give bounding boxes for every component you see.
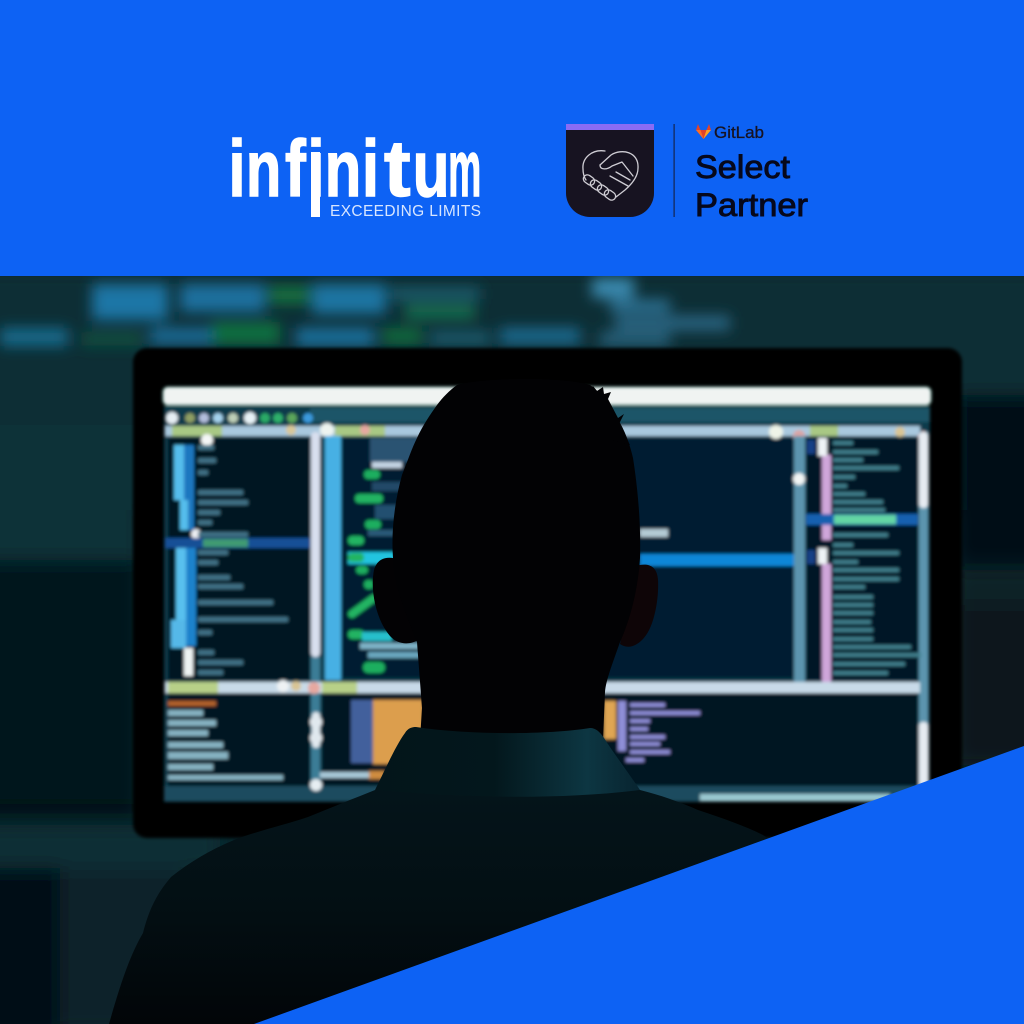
left selected row: [165, 538, 310, 548]
lower left code: [168, 701, 283, 780]
lower right code: [618, 701, 700, 762]
person: hair spikes: [588, 386, 630, 445]
icon: handshake: [582, 151, 638, 202]
right selected row: [806, 514, 918, 525]
centre code and green tags: [348, 438, 425, 673]
partner title: Partner: [695, 187, 808, 223]
person: ears: [373, 558, 658, 647]
person: head and neck: [392, 379, 640, 740]
right code tree: [807, 438, 921, 682]
logo: infinitum: [228, 124, 481, 220]
partner badge: [566, 124, 654, 217]
person: collar: [375, 727, 640, 797]
person: body: [109, 790, 800, 1024]
centre blue row: [640, 554, 794, 566]
logo: infinitum: u: [413, 124, 449, 213]
orange and blue columns: [320, 700, 616, 779]
header bars: [165, 426, 920, 436]
partner title: [695, 149, 808, 223]
top white bar: [163, 387, 931, 405]
blurred background code: [0, 278, 730, 346]
lower header bar: [165, 682, 920, 693]
logo: infinitum: f: [285, 124, 306, 213]
vertical bars: [311, 432, 320, 657]
logo tagline: EXCEEDING LIMITS: [330, 203, 481, 220]
partner title: Select: [695, 149, 790, 185]
header band: [0, 0, 1024, 276]
logo: infinitum: i: [362, 124, 379, 213]
logo: infinitum: n: [246, 124, 281, 213]
logo: infinitum: n: [325, 124, 361, 213]
photo: room background: [0, 276, 1024, 1024]
monitor: [133, 348, 962, 838]
divider: [674, 124, 675, 217]
status line: [700, 794, 890, 801]
logo: infinitum: i: [228, 124, 246, 213]
tab row dots: [166, 412, 313, 424]
logo: infinitum: i: [308, 124, 324, 213]
logo descender stroke: [311, 152, 320, 217]
blue corner triangle: [254, 746, 1024, 1024]
text: m: [448, 124, 481, 213]
monitor screen: [163, 387, 931, 802]
icon: GitLab fox: [696, 124, 711, 139]
logo: infinitum: t: [384, 124, 411, 213]
room tonal zones: [0, 270, 1024, 1024]
GitLab wordmark: GitLab: [714, 124, 764, 142]
left tree: [171, 445, 288, 676]
